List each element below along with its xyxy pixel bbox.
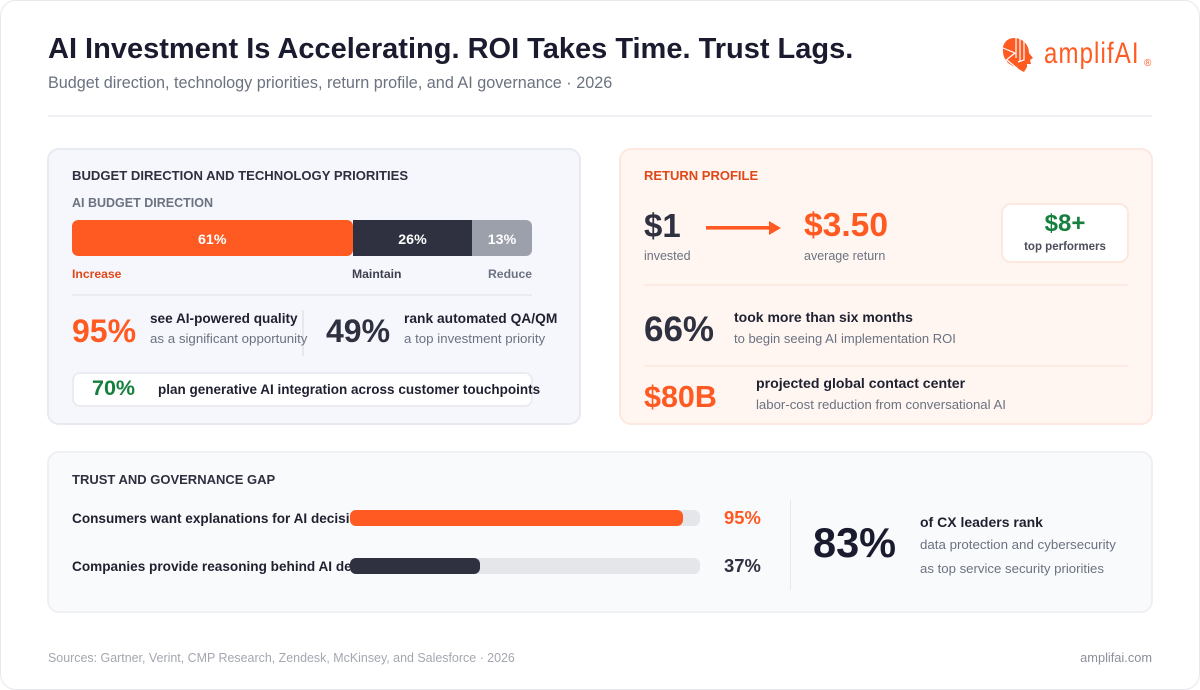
stat text: CX leaders: of CX leaders rank — [920, 514, 1043, 530]
registered mark: ® — [1144, 58, 1151, 69]
stat text: QA/QM priority: a top investment priority — [404, 331, 545, 346]
badge: $8+ top performers: top performers — [1024, 241, 1106, 253]
stat text: CX leaders: as top service security priorities — [920, 561, 1104, 576]
bar track — [350, 510, 700, 526]
stat text: labor cost: labor-cost reduction from conversational AI — [756, 397, 1006, 412]
bar row: consumers want explanations: Consumers want explanations for AI decisions — [72, 510, 374, 526]
stat text: CX leaders — [920, 514, 1116, 576]
subtitle: Budget direction, technology priorities, return profile, and AI governance · 2026 — [48, 74, 612, 92]
stat text: labor cost: projected global contact center — [756, 375, 965, 391]
panel: trust and governance gap — [47, 451, 1153, 613]
logo: amplifAI — [1002, 37, 1152, 72]
segment: maintain 26%: 26% — [398, 232, 427, 248]
value: $1 invested: invested — [644, 249, 691, 263]
badge: $8+ top performers — [1001, 203, 1129, 263]
label: reduce: Reduce — [488, 267, 532, 281]
sub-heading: AI budget direction: AI BUDGET DIRECTION — [72, 196, 213, 210]
callout: 70% generative AI — [72, 372, 533, 407]
panel heading: budget: BUDGET DIRECTION AND TECHNOLOGY PRIORITIES — [72, 168, 408, 183]
stat text: quality opportunity: as a significant opportunity — [150, 331, 307, 346]
panel: return profile — [619, 148, 1153, 425]
callout text: plan generative AI integration across customer touchpoints — [158, 382, 540, 397]
stat text: six months: took more than six months — [734, 309, 913, 325]
bar value: 37% — [724, 555, 761, 576]
bar row: companies provide reasoning: Companies provide reasoning behind AI decisions — [72, 558, 399, 574]
stat text: quality opportunity: see AI-powered quality — [150, 311, 298, 326]
bar fill 95% — [350, 510, 683, 526]
segment: increase 61%: 61% — [198, 232, 226, 248]
title: AI Investment Is Accelerating. ROI Takes Time. Trust Lags. — [48, 32, 853, 64]
bar row: companies provide reasoning — [72, 555, 761, 576]
stat text: six months — [734, 309, 956, 346]
stat: 49%: 49% — [326, 313, 390, 349]
stat: 95%: 95% — [72, 313, 136, 349]
segment: increase 61% — [72, 220, 352, 256]
value: $1 invested: $1 — [644, 207, 681, 244]
stat text: QA/QM priority: rank automated QA/QM — [404, 311, 557, 326]
stat: 83%: 83% — [813, 518, 896, 566]
wordmark: amplifAI — [1044, 37, 1140, 70]
panel heading: return profile: RETURN PROFILE — [644, 168, 758, 183]
badge: $8+ top performers: $8+ — [1045, 210, 1085, 237]
segment: reduce 13%: 13% — [488, 232, 516, 248]
footer sources: Sources: Gartner, Verint, CMP Research, Zendesk, McKinsey, and Salesforce · 2026 — [48, 651, 515, 665]
value: $3.50 average return — [804, 207, 888, 263]
icon: head with segments — [1002, 38, 1033, 72]
stat text: quality opportunity — [150, 311, 308, 346]
value: $3.50 average return: average return — [804, 249, 885, 263]
stat text: CX leaders: data protection and cybersecurity — [920, 537, 1116, 552]
segment: maintain 26% — [353, 220, 472, 256]
stat: 66%: 66% — [644, 310, 714, 349]
header divider — [48, 115, 1152, 117]
footer site: amplifai.com — [1080, 650, 1152, 665]
bar row: consumers want explanations — [72, 507, 761, 528]
value: $1 invested — [644, 207, 691, 263]
bar fill 37% — [350, 558, 480, 574]
label: maintain: Maintain — [352, 267, 401, 281]
stat text: six months: to begin seeing AI implementation ROI — [734, 331, 956, 346]
bar track — [350, 558, 700, 574]
callout number: 70% — [92, 376, 135, 400]
stacked bar: budget direction — [72, 220, 532, 256]
arrow — [706, 221, 781, 235]
bar value: 95% — [724, 507, 761, 528]
stat: $80B: $80B — [644, 380, 717, 414]
stat text: labor cost — [756, 375, 1006, 412]
label: increase: Increase — [72, 267, 121, 281]
stat text: QA/QM priority — [404, 311, 557, 346]
panel heading: trust: TRUST AND GOVERNANCE GAP — [72, 472, 275, 487]
panel: budget direction and technology priorities — [47, 148, 581, 425]
segment: reduce 13% — [472, 220, 532, 256]
value: $3.50 average return: $3.50 — [804, 207, 888, 244]
